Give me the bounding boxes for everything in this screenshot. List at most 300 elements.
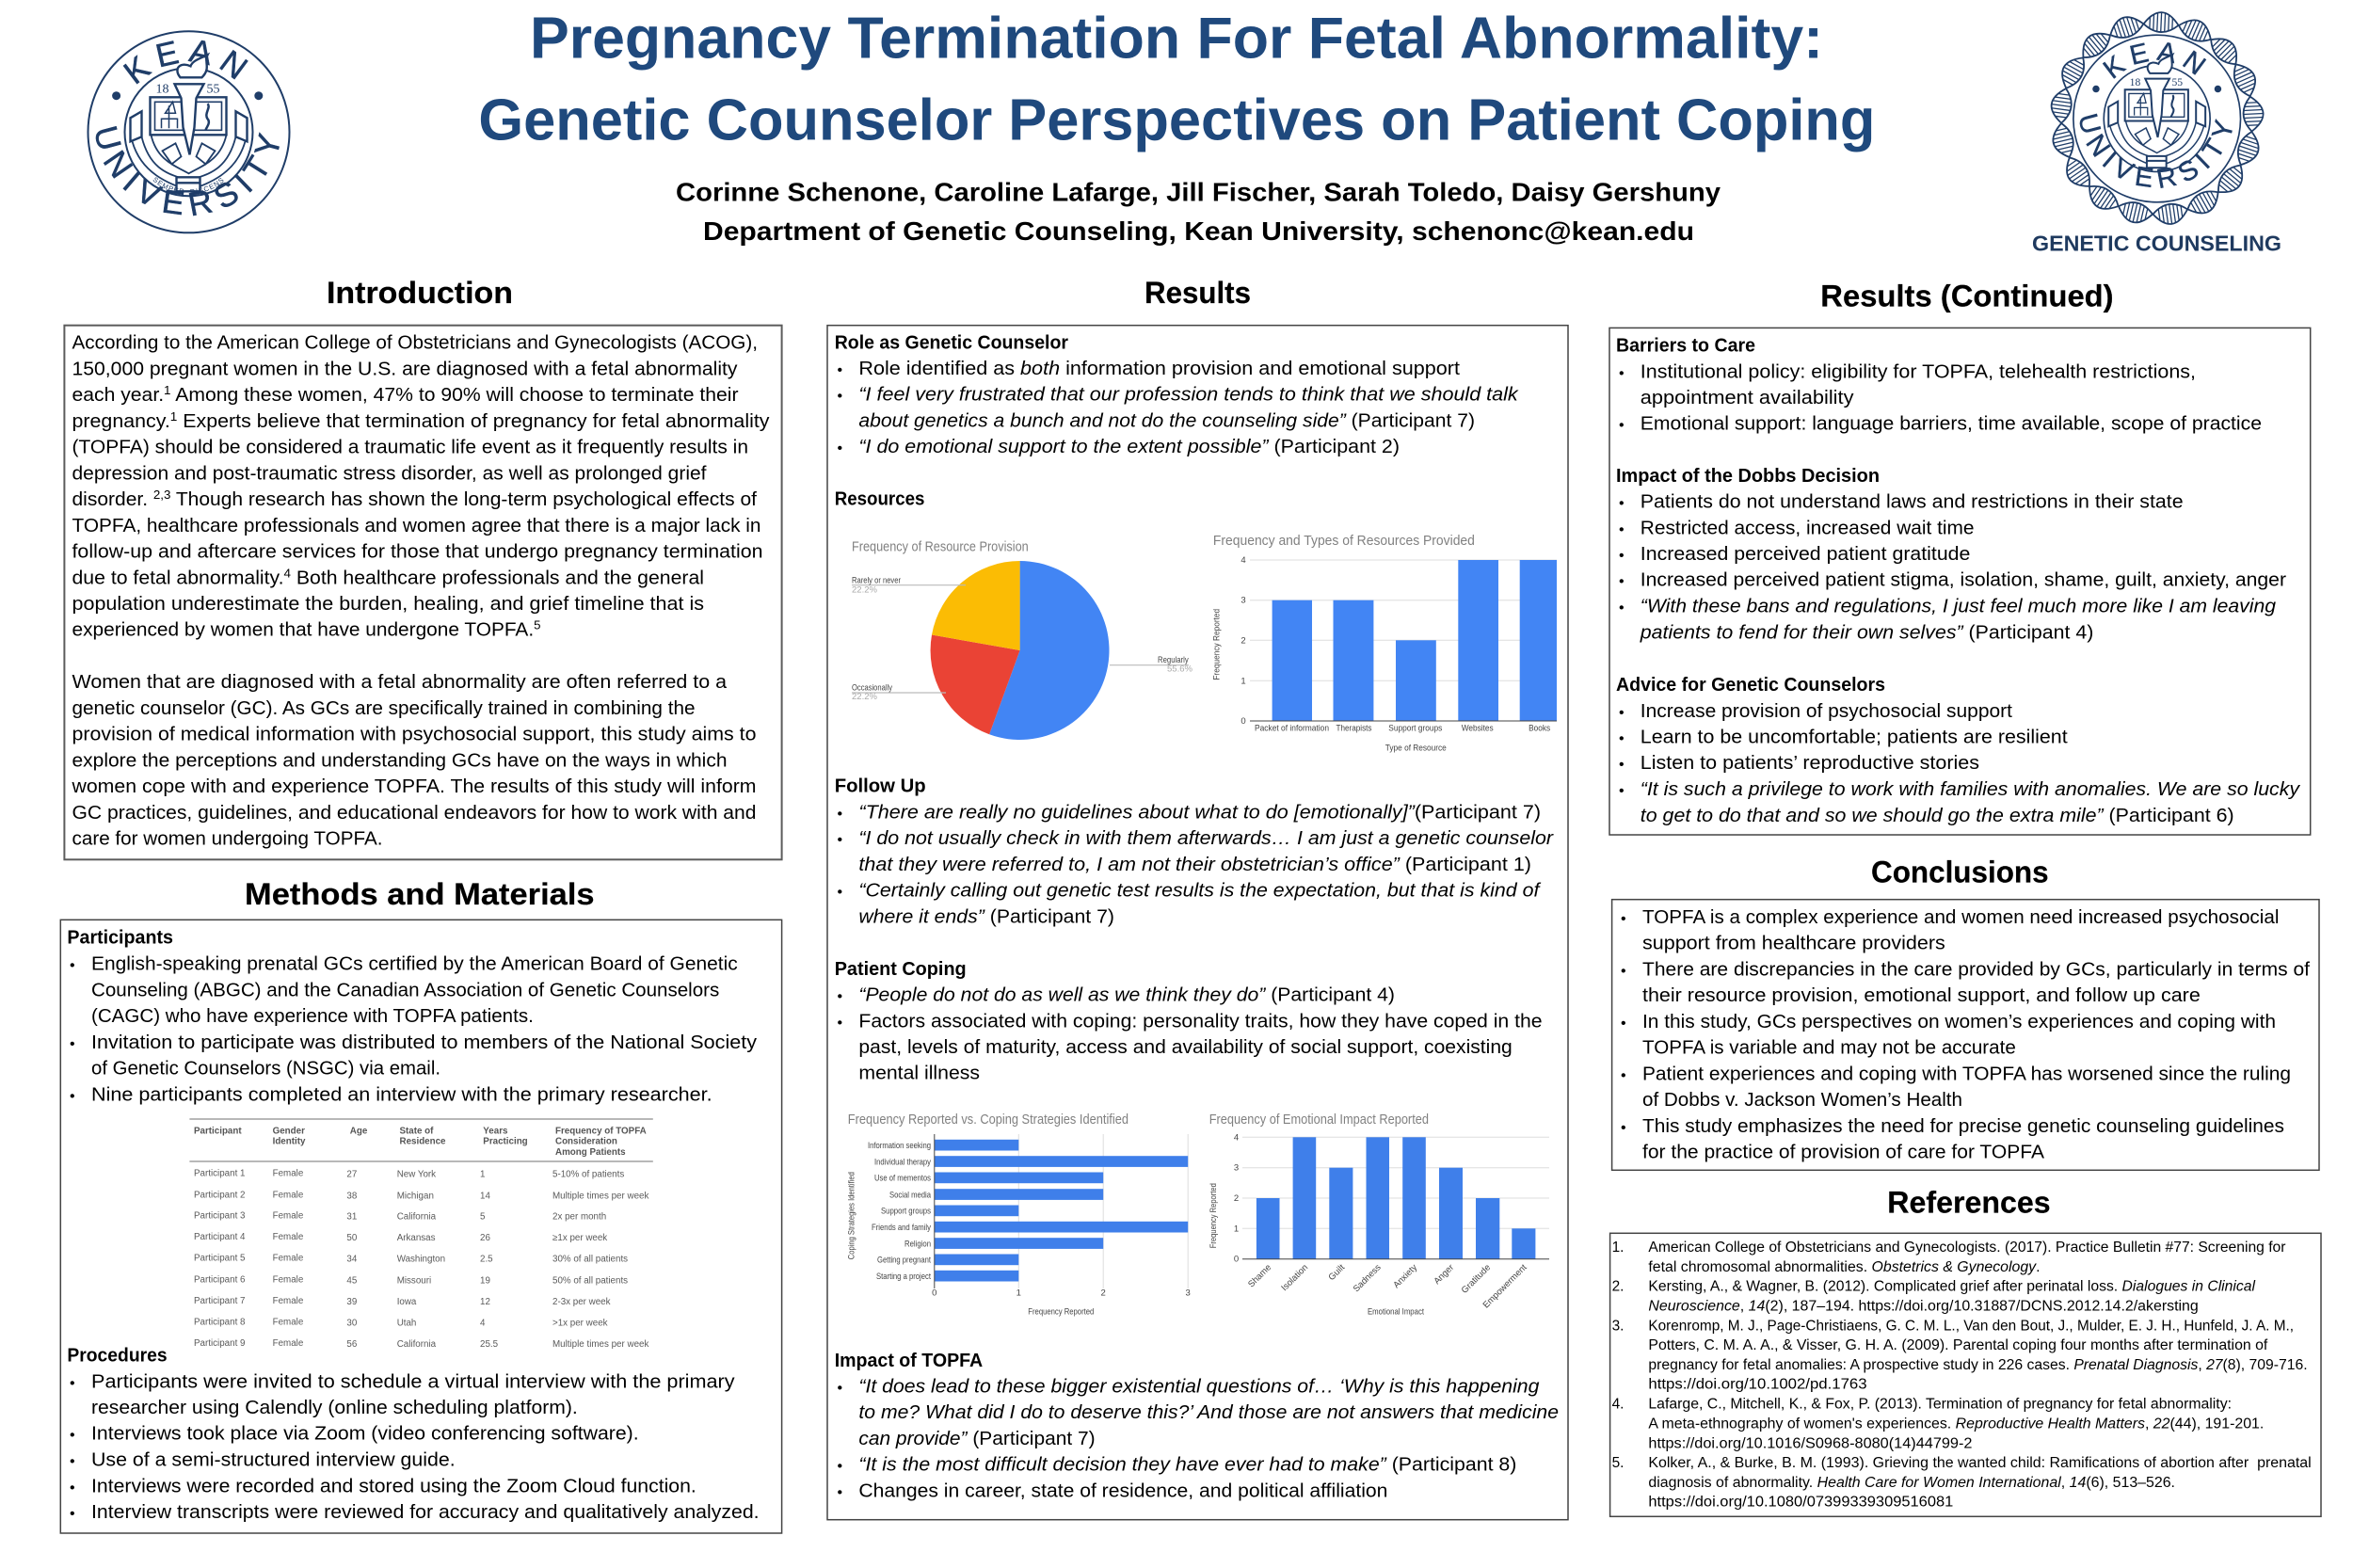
text block: introduction paragraph 1: Both healthcare professionals and the general	[291, 567, 704, 588]
title: Pregnancy Termination For Fetal Abnormality:	[530, 7, 1823, 72]
subheading: resources: Resources	[835, 488, 924, 510]
text block: conclusion bullets: TOPFA is variable and may not be accurate	[1642, 1037, 2016, 1059]
text block: conclusion bullets: of Dobbs v. Jackson Women’s Health	[1642, 1089, 1962, 1111]
text block: reference list: pregnancy for fetal anomalies: A prospective study in 226 cases. Prenatal Diagnosis, 27(8), 709-716.	[1648, 1357, 2308, 1373]
panel: introduction	[64, 326, 782, 859]
text block: impact of TOPFA: “It is the most difficult decision they have ever had to make” (Participant 8)	[858, 1454, 1516, 1476]
bar chart: frequency of emotional impact: Anger	[1432, 1262, 1456, 1287]
text block: impact of the Dobbs decision: Increased perceived patient stigma, isolation, shame, guilt, anxiety, anger	[1641, 569, 2286, 591]
panel: references	[1610, 1233, 2321, 1516]
table: participant demographics: Participant 1	[194, 1169, 245, 1179]
heading: Results: Results	[1144, 276, 1251, 310]
bar chart: frequency of emotional impact: 3	[1234, 1163, 1239, 1174]
table: participant demographics: Participant 6	[194, 1274, 246, 1285]
text block: conclusion bullets: •	[1621, 1016, 1626, 1032]
text block: introduction paragraph 1: 1	[170, 409, 177, 424]
text block: barriers to care: appointment availability	[1641, 387, 1854, 408]
bar chart: frequency and types of resources provided	[1212, 533, 1557, 753]
text block: procedures: Interviews took place via Zoom (video conferencing software).	[91, 1423, 639, 1445]
bar chart: coping strategies identified: Religion	[904, 1239, 931, 1249]
text block: introduction paragraph 1	[72, 332, 770, 641]
text block: conclusion bullets: This study emphasizes the need for precise genetic counseling guidelines	[1642, 1115, 2284, 1137]
text block: impact of TOPFA: Changes in career, state of residence, and political affiliation	[858, 1480, 1387, 1501]
text block: barriers to care: Barriers to Care	[1616, 335, 1755, 357]
bar chart: frequency and types of resources provided: Type of Resource	[1385, 743, 1447, 753]
text block: impact of the Dobbs decision: “With these bans and regulations, I just feel much more like I am leaving	[1641, 595, 2277, 616]
heading: Introduction: Introduction	[327, 276, 513, 310]
text block: participants: Participants	[67, 926, 173, 948]
table: participant demographics: Participant 2	[194, 1190, 245, 1200]
table: participant demographics: Female	[273, 1190, 304, 1200]
bar chart: frequency and types of resources provided: 1	[1241, 676, 1246, 686]
bar chart: frequency and types of resources provided: 3	[1241, 596, 1246, 606]
text block: introduction paragraph 1: disorder.	[72, 488, 146, 510]
table: participant demographics: Participant 9	[194, 1338, 245, 1349]
table: participant demographics: 27	[346, 1170, 357, 1180]
text block: reference list: Lafarge, C., Mitchell, K., & Fox, P. (2013). Termination of pregnancy for fetal abnormality:	[1648, 1397, 2232, 1413]
text block: reference list: https://doi.org/10.1080/07399339309516081	[1648, 1495, 1953, 1511]
table: participant demographics: 12	[480, 1297, 490, 1307]
text block: follow up: where it ends” (Participant 7)	[858, 905, 1114, 927]
pie chart: frequency of resource provision	[852, 539, 1193, 740]
bar chart: coping strategies identified: 3	[1186, 1288, 1191, 1299]
text block: introduction paragraph 1: pregnancy.	[72, 410, 166, 432]
table: participant demographics: Participant 8	[194, 1318, 246, 1328]
table: participant demographics: ≥1x per week	[552, 1233, 607, 1243]
text block: patient coping: Factors associated with coping: personality traits, how they have coped in the	[858, 1010, 1543, 1032]
text block: impact of the Dobbs decision: patients to fend for their own selves” (Participant 4)	[1640, 621, 2093, 643]
text block: introduction paragraph 2: provision of medical information with psychosocial support, this study aims to	[72, 724, 757, 745]
bar chart: coping strategies identified: 0	[932, 1288, 936, 1299]
table: participant demographics: Frequency of TOPFA	[555, 1126, 647, 1136]
table: participant demographics: Female	[273, 1232, 304, 1242]
text block: impact of the Dobbs decision: •	[1619, 574, 1625, 590]
text block: introduction paragraph 1: each year.	[72, 384, 161, 406]
text block: impact of TOPFA	[835, 1350, 1559, 1501]
text block: follow up: “There are really no guidelines about what to do [emotionally]” (Participant 7)	[858, 801, 1541, 823]
text block: patient coping: mental illness	[858, 1063, 980, 1084]
title: Genetic Counselor Perspectives on Patient Coping	[478, 88, 1875, 152]
text block: participants: •	[70, 1036, 75, 1052]
bar chart: frequency and types of resources provided: 2	[1241, 635, 1246, 646]
text block: reference list: Kolker, A., & Burke, B. M. (1993). Grieving the wanted child: Ramifications of abortion after prenatal	[1648, 1455, 2312, 1471]
text block: introduction paragraph 2: care for women undergoing TOPFA.	[72, 828, 382, 850]
text block: role as genetic counselor: •	[838, 362, 842, 378]
bar chart: frequency and types of resources provided: Frequency and Types of Resources Provided	[1213, 533, 1475, 549]
text block: conclusion bullets: •	[1621, 963, 1626, 979]
text block: reference list: https://doi.org/10.1016/S0968-8080(14)44799-2	[1648, 1435, 1973, 1451]
text block: barriers to care: •	[1619, 365, 1625, 381]
bar chart: frequency of emotional impact: Guilt	[1327, 1262, 1347, 1283]
table: participant demographics: 39	[346, 1297, 357, 1307]
table: participant demographics: Among Patients	[555, 1147, 626, 1158]
text block: impact of TOPFA: •	[838, 1380, 842, 1397]
text block: reference list: https://doi.org/10.1002/pd.1763	[1648, 1377, 1867, 1393]
text block: participants: Counseling (ABGC) and the Canadian Association of Genetic Counselors	[91, 979, 719, 1000]
text block: introduction paragraph 1: depression and post-traumatic stress disorder, as well as prolonged grief	[72, 462, 707, 484]
text block: participants: •	[70, 957, 75, 973]
text block: participants: of Genetic Counselors (NSGC) via email.	[91, 1058, 440, 1080]
pie chart: frequency of resource provision: Frequency of Resource Provision	[852, 539, 1029, 555]
table: participant demographics: Female	[273, 1254, 304, 1264]
table: participant demographics	[189, 1118, 653, 1350]
text block: barriers to care	[1616, 335, 2262, 435]
table: participant demographics: 2x per month	[552, 1212, 606, 1223]
text block: follow up	[835, 776, 1554, 927]
logo: Kean University seal: KEAN	[122, 40, 248, 85]
text block: advice for genetic counselors: •	[1619, 730, 1625, 747]
table: participant demographics: 4	[480, 1319, 486, 1329]
table: participant demographics: Female	[273, 1169, 304, 1179]
text block: participants: Invitation to participate was distributed to members of the National Society	[91, 1032, 758, 1053]
text block: participants	[67, 926, 758, 1105]
text block: conclusion bullets: •	[1621, 1067, 1626, 1083]
text block: reference list: diagnosis of abnormality. Health Care for Women International , 14(6), 513–526.	[1648, 1475, 2175, 1491]
table: participant demographics: 25.5	[480, 1339, 499, 1350]
text block: introduction paragraph 1: TOPFA, healthcare professionals and women agree that there is a major lack in	[72, 515, 760, 536]
table: participant demographics: Identity	[273, 1137, 306, 1147]
bar chart: frequency of emotional impact: Frequency Reported	[1209, 1183, 1219, 1248]
table: participant demographics: 30% of all patients	[552, 1255, 628, 1265]
text block: introduction paragraph 1: 150,000 pregnant women in the U.S. are diagnosed with a fetal abnormality	[72, 358, 738, 379]
table: participant demographics: Gender	[273, 1126, 305, 1136]
text block: role as genetic counselor: •	[838, 440, 842, 456]
table: participant demographics: Multiple times per week	[552, 1191, 648, 1201]
bar chart: coping strategies identified: Social media	[889, 1190, 932, 1200]
heading: Results (Continued): Results (Continued)	[1820, 279, 2114, 312]
logo: Genetic Counseling seal with DNA ring: 55	[2171, 76, 2183, 88]
text block: introduction paragraph 1: 2,3	[153, 488, 170, 502]
text block: impact of the Dobbs decision: •	[1619, 548, 1625, 564]
table: participant demographics: Washington	[397, 1255, 445, 1265]
pie chart: frequency of resource provision: 55.6%	[1167, 664, 1193, 674]
authors and affiliation: Department of Genetic Counseling, Kean University, schenonc@kean.edu	[703, 216, 1694, 246]
text block: reference list: Kersting, A., & Wagner, B. (2012). Complicated grief after perinatal loss. Dialogues in Clinical	[1648, 1279, 2256, 1295]
text block: reference list: 4.	[1612, 1397, 1624, 1413]
text block: introduction paragraph 2: Women that are diagnosed with a fetal abnormality are often referred to a	[72, 671, 728, 693]
logo: Kean University seal: 55	[207, 82, 220, 96]
table: participant demographics: Participant	[194, 1126, 242, 1136]
text block: reference list: Neuroscience, 14(2), 187–194. https://doi.org/10.31887/DCNS.2012.14.2/akersting	[1648, 1299, 2199, 1315]
table: participant demographics: Participant 4	[194, 1232, 246, 1242]
text block: reference list	[1612, 1240, 2312, 1511]
text block: introduction paragraph 1: due to fetal abnormality.	[72, 567, 277, 588]
table: participant demographics: California	[397, 1339, 437, 1350]
text block: reference list: 3.	[1612, 1318, 1624, 1334]
panel: methods and materials	[60, 920, 782, 1533]
text block: follow up: •	[838, 832, 842, 848]
bar chart: frequency of emotional impact: Gratitude	[1460, 1262, 1493, 1296]
text block: introduction paragraph 2	[71, 671, 757, 850]
bar chart: frequency of emotional impact: Frequency of Emotional Impact Reported	[1209, 1112, 1429, 1128]
bar chart: frequency and types of resources provided: Therapists	[1337, 724, 1372, 734]
text block: procedures: researcher using Calendly (online scheduling platform).	[91, 1397, 578, 1418]
table: participant demographics: 45	[346, 1275, 358, 1286]
table: participant demographics: New York	[397, 1170, 436, 1180]
bar chart: frequency and types of resources provided: 4	[1241, 555, 1246, 566]
bar chart: frequency of emotional impact: 2	[1234, 1193, 1239, 1204]
heading: References: References	[1887, 1185, 2051, 1219]
pie chart: frequency of resource provision: 22.2%	[852, 692, 877, 702]
text block: introduction paragraph 1: follow-up and aftercare services for those that undergo pregnancy termination	[72, 540, 762, 563]
text block: advice for genetic counselors: Advice for Genetic Counselors	[1616, 674, 1885, 696]
bar chart: frequency and types of resources provided: Books	[1529, 724, 1550, 734]
text block: introduction paragraph 1: experienced by women that have undergone TOPFA.	[72, 619, 526, 641]
text block: procedures: •	[70, 1480, 75, 1496]
bar chart: frequency and types of resources provided: Frequency Reported	[1212, 609, 1222, 680]
text block: role as genetic counselor: •	[838, 389, 842, 405]
logo: Genetic Counseling seal with DNA ring: KEAN	[2103, 42, 2206, 79]
logo: Kean University seal	[87, 30, 290, 233]
table: participant demographics: 31	[346, 1212, 357, 1223]
pie chart: frequency of resource provision: 22.2%	[852, 585, 877, 595]
text block: introduction paragraph 1: Experts believe that termination of pregnancy for fetal abnormality	[177, 410, 770, 432]
text block: advice for genetic counselors: Listen to patients’ reproductive stories	[1641, 752, 1979, 774]
text block: reference list: 1.	[1612, 1240, 1624, 1256]
table: participant demographics: California	[397, 1212, 437, 1223]
table: participant demographics: Iowa	[397, 1297, 417, 1307]
bar chart: frequency of emotional impact: Emotional Impact	[1368, 1307, 1424, 1318]
text block: impact of the Dobbs decision	[1616, 465, 2286, 643]
text block: introduction paragraph 1: 1	[164, 383, 171, 397]
authors and affiliation: Corinne Schenone, Caroline Lafarge, Jill Fischer, Sarah Toledo, Daisy Gershuny	[676, 177, 1721, 206]
pie chart: frequency of resource provision: Occasionally	[852, 683, 892, 694]
pie chart: frequency of resource provision: Rarely or never	[852, 575, 901, 585]
text block: impact of the Dobbs decision: Increased perceived patient gratitude	[1641, 543, 1970, 565]
table: participant demographics: Participant 5	[194, 1254, 246, 1264]
logo: Genetic Counseling seal with DNA ring	[2032, 11, 2281, 256]
table: participant demographics: 38	[346, 1191, 358, 1201]
logo: Kean University seal: 18	[156, 82, 169, 96]
text block: procedures	[67, 1345, 760, 1523]
table: participant demographics: Female	[273, 1211, 304, 1222]
text block: procedures: •	[70, 1453, 75, 1469]
logo: Kean University seal: UNIVERSITY	[96, 126, 280, 216]
bar chart: coping strategies identified: Frequency Reported	[1028, 1307, 1094, 1318]
text block: role as genetic counselor: Role identified as both information provision and emotional support	[858, 358, 1460, 379]
text block: procedures: Procedures	[67, 1345, 168, 1367]
table: participant demographics: 50% of all patients	[552, 1275, 628, 1286]
text block: role as genetic counselor: about genetics a bunch and not do the counseling side” (Participant 7)	[858, 409, 1475, 431]
text block: advice for genetic counselors: Increase provision of psychosocial support	[1641, 700, 2012, 722]
text block: follow up: •	[838, 885, 842, 901]
text block: follow up: Follow Up	[835, 776, 926, 797]
text block: participants: Nine participants completed an interview with the primary researcher.	[91, 1083, 712, 1105]
text block: introduction paragraph 1: population underestimate the burden, healing, and grief timeline that is	[72, 593, 704, 615]
text block: conclusion bullets: for the practice of provision of care for TOPFA	[1642, 1142, 2044, 1163]
text block: introduction paragraph 2: genetic counselor (GC). As GCs are specifically trained in combining the	[72, 697, 695, 719]
bar chart: coping strategies identified: Getting pregnant	[877, 1256, 931, 1266]
text block: procedures: •	[70, 1428, 75, 1444]
logo: Kean University seal: SEMPER DISCENS	[152, 177, 224, 193]
text block: procedures: Participants were invited to schedule a virtual interview with the primary	[91, 1370, 735, 1392]
text block: advice for genetic counselors: •	[1619, 705, 1625, 721]
text block: advice for genetic counselors: Learn to be uncomfortable; patients are resilient	[1641, 727, 2068, 747]
table: participant demographics: Female	[273, 1274, 304, 1285]
text block: patient coping: •	[838, 988, 842, 1005]
text block: conclusion bullets: In this study, GCs perspectives on women’s experiences and coping with	[1642, 1011, 2276, 1032]
panel: results continued	[1609, 328, 2311, 835]
text block: impact of the Dobbs decision: Restricted access, increased wait time	[1641, 517, 1975, 538]
table: participant demographics: Years	[483, 1126, 508, 1136]
text block: role as genetic counselor: Role as Genetic Counselor	[835, 331, 1068, 353]
table: participant demographics: 19	[480, 1275, 490, 1286]
panel: results	[827, 326, 1568, 1520]
text block: procedures: Use of a semi-structured interview guide.	[91, 1448, 456, 1470]
bar chart: frequency of emotional impact: 0	[1234, 1255, 1239, 1265]
text block: impact of TOPFA: “It does lead to these bigger existential questions of… ‘Why is this happening	[858, 1376, 1540, 1397]
text block: introduction paragraph 1: 4	[283, 566, 291, 580]
bar chart: coping strategies identified: 1	[1016, 1288, 1021, 1299]
table: participant demographics: Consideration	[555, 1137, 617, 1147]
logo: Genetic Counseling seal with DNA ring: GENETIC COUNSELING	[2032, 232, 2281, 256]
table: participant demographics: >1x per week	[552, 1319, 608, 1329]
title	[478, 7, 1875, 152]
text block: follow up: “I do not usually check in with them afterwards… I am just a genetic counselor	[858, 827, 1554, 849]
table: participant demographics: Female	[273, 1318, 304, 1328]
text block: patient coping: Patient Coping	[835, 958, 967, 980]
bar chart: frequency and types of resources provided: Websites	[1462, 724, 1494, 734]
table: participant demographics: Age	[350, 1126, 368, 1136]
table: participant demographics: Practicing	[483, 1137, 528, 1147]
bar chart: frequency of emotional impact: Sadness	[1352, 1262, 1384, 1294]
bar chart: frequency of emotional impact: Anxiety	[1391, 1262, 1419, 1290]
text block: conclusion bullets	[1621, 906, 2310, 1163]
text block: role as genetic counselor: “I feel very frustrated that our profession tends to think that we should talk	[858, 384, 1520, 406]
logo: Genetic Counseling seal with DNA ring: UNIVERSITY	[2080, 113, 2233, 188]
text block: impact of TOPFA: •	[838, 1484, 842, 1500]
text block: reference list: American College of Obstetricians and Gynecologists. (2017). Practice Bulletin #77: Screening for	[1648, 1240, 2285, 1256]
text block: conclusion bullets: There are discrepancies in the care provided by GCs, particularly in terms of	[1642, 958, 2310, 980]
panel: conclusions	[1612, 900, 2319, 1170]
table: participant demographics: 56	[346, 1339, 358, 1350]
bar chart: frequency and types of resources provided: 0	[1241, 716, 1246, 727]
text block: role as genetic counselor	[835, 331, 1520, 457]
table: participant demographics: Michigan	[397, 1191, 434, 1201]
text block: introduction paragraph 1: Among these women, 47% to 90% will choose to terminate their	[171, 384, 739, 406]
table: participant demographics: Residence	[399, 1137, 446, 1147]
text block: advice for genetic counselors: •	[1619, 783, 1625, 799]
bar chart: frequency of emotional impact: Shame	[1246, 1262, 1273, 1289]
bar chart: coping strategies identified: Starting a project	[876, 1272, 931, 1282]
bar chart: frequency of emotional impact	[1209, 1112, 1549, 1318]
text block: conclusion bullets: TOPFA is a complex experience and women need increased psychosocial	[1642, 906, 2279, 928]
logo: Genetic Counseling seal with DNA ring: 18	[2130, 76, 2140, 88]
bar chart: coping strategies identified: Coping Strategies Identified	[847, 1172, 856, 1259]
text block: impact of the Dobbs decision: •	[1619, 521, 1625, 537]
bar chart: coping strategies identified	[847, 1112, 1191, 1318]
text block: conclusion bullets: •	[1621, 911, 1626, 927]
bar chart: coping strategies identified: Use of mementos	[874, 1174, 931, 1184]
text block: patient coping: past, levels of maturity, access and availability of social support, coexisting	[858, 1036, 1513, 1058]
bar chart: coping strategies identified: Support groups	[881, 1207, 931, 1217]
text block: patient coping: •	[838, 1015, 842, 1031]
text block: conclusion bullets: support from healthcare providers	[1642, 933, 1945, 954]
text block: patient coping: “People do not do as well as we think they do” (Participant 4)	[858, 984, 1395, 1005]
text block: reference list: 5.	[1612, 1455, 1624, 1471]
text block: barriers to care: Emotional support: language barriers, time available, scope of practice	[1641, 413, 2262, 435]
bar chart: frequency and types of resources provided: Support groups	[1388, 724, 1443, 734]
text block: reference list: Potters, C. M. A. A., & Visser, G. H. A. (2009). Parental coping four months after termination of	[1648, 1337, 2268, 1353]
text block: impact of TOPFA: Impact of TOPFA	[835, 1350, 983, 1371]
bar chart: coping strategies identified: Individual therapy	[874, 1157, 931, 1167]
text block: advice for genetic counselors: “It is such a privilege to work with families with anomalies. We are so lucky	[1641, 778, 2301, 800]
table: participant demographics: 34	[346, 1255, 358, 1265]
text block: participants: •	[70, 1088, 75, 1104]
table: participant demographics: Missouri	[397, 1275, 431, 1286]
table: participant demographics: Participant 3	[194, 1211, 246, 1222]
text block: introduction paragraph 2: GC practices, guidelines, and educational endeavors for how to work with and	[72, 802, 757, 824]
table: participant demographics: Participant 7	[194, 1296, 245, 1306]
table: participant demographics: 26	[480, 1233, 490, 1243]
table: participant demographics: Utah	[397, 1319, 416, 1329]
text block: conclusion bullets: •	[1621, 1120, 1626, 1136]
pie chart: frequency of resource provision: Regularly	[1158, 655, 1189, 665]
text block: reference list: 2.	[1612, 1279, 1624, 1295]
table: participant demographics: 30	[346, 1319, 358, 1329]
text block: follow up: “Certainly calling out genetic test results is the expectation, but that is kind of	[858, 880, 1542, 902]
text block: impact of the Dobbs decision: •	[1619, 600, 1625, 616]
table: participant demographics: State of	[399, 1126, 434, 1136]
table: participant demographics: Female	[273, 1296, 304, 1306]
text block: conclusion bullets: their resource provision, emotional support, and follow up care	[1642, 984, 2201, 1006]
bar chart: coping strategies identified: Information seeking	[868, 1141, 931, 1151]
bar chart: frequency of emotional impact: 4	[1234, 1132, 1239, 1143]
bar chart: frequency of emotional impact: Empowerment	[1481, 1262, 1529, 1310]
bar chart: coping strategies identified: Frequency Reported vs. Coping Strategies Identified	[848, 1112, 1128, 1128]
text block: follow up: that they were referred to, I am not their obstetrician’s office” (Participant 1)	[858, 854, 1531, 875]
text block: introduction paragraph 1: 5	[534, 618, 540, 632]
text block: impact of the Dobbs decision: Patients do not understand laws and restrictions in their state	[1641, 491, 2184, 513]
table: participant demographics: 5-10% of patients	[552, 1170, 624, 1180]
text block: advice for genetic counselors: to get to do that and so we should go the extra mile” (Participant 6)	[1641, 805, 2234, 826]
heading: Conclusions: Conclusions	[1871, 856, 2049, 889]
table: participant demographics: 14	[480, 1191, 490, 1201]
bar chart: frequency of emotional impact: Isolation	[1279, 1262, 1310, 1293]
text block: participants: English-speaking prenatal GCs certified by the American Board of Genetic	[91, 952, 738, 974]
authors and affiliation	[676, 177, 1721, 246]
text block: introduction paragraph 1: According to the American College of Obstetricians and Gynecologists (ACOG),	[72, 332, 758, 354]
text block: follow up: •	[838, 806, 842, 822]
text block: impact of TOPFA: can provide” (Participant 7)	[858, 1428, 1096, 1449]
bar chart: frequency and types of resources provided: Packet of information	[1255, 724, 1329, 734]
text block: procedures: Interviews were recorded and stored using the Zoom Cloud function.	[91, 1475, 696, 1496]
text block: introduction paragraph 2: women cope with and experience TOPFA. The results of this study will inform	[71, 776, 757, 797]
text block: reference list: A meta-ethnography of women's experiences. Reproductive Health Matters , 22(44), 191-201.	[1648, 1416, 2264, 1432]
text block: impact of TOPFA: •	[838, 1459, 842, 1475]
text block: impact of TOPFA: to me? What did I do to deserve this?’ And those are not answers that medicine	[858, 1401, 1559, 1423]
text block: advice for genetic counselors	[1616, 674, 2301, 826]
text block: patient coping	[835, 958, 1543, 1084]
table: participant demographics: Arkansas	[397, 1233, 436, 1243]
table: participant demographics: 50	[346, 1233, 358, 1243]
bar chart: frequency of emotional impact: 1	[1234, 1224, 1239, 1234]
text block: participants: (CAGC) who have experience with TOPFA patients.	[91, 1005, 534, 1027]
text block: reference list: fetal chromosomal abnormalities. Obstetrics & Gynecology .	[1648, 1259, 2041, 1275]
text block: procedures: •	[70, 1506, 75, 1522]
heading: Methods and Materials: Methods and Materials	[245, 877, 595, 911]
text block: introduction paragraph 2: explore the perceptions and understanding GCs have on the ways in which	[72, 749, 727, 771]
table: participant demographics: 5	[480, 1212, 486, 1223]
text block: conclusion bullets: Patient experiences and coping with TOPFA has worsened since the ruling	[1642, 1063, 2291, 1084]
table: participant demographics: Female	[273, 1338, 304, 1349]
text block: impact of the Dobbs decision: •	[1619, 496, 1625, 512]
text block: procedures: Interview transcripts were reviewed for accuracy and qualitatively analyzed.	[91, 1501, 760, 1523]
text block: advice for genetic counselors: •	[1619, 757, 1625, 773]
table: participant demographics: 2-3x per week	[552, 1297, 611, 1307]
table: participant demographics: 2.5	[480, 1255, 493, 1265]
text block: impact of the Dobbs decision: Impact of the Dobbs Decision	[1616, 465, 1880, 487]
